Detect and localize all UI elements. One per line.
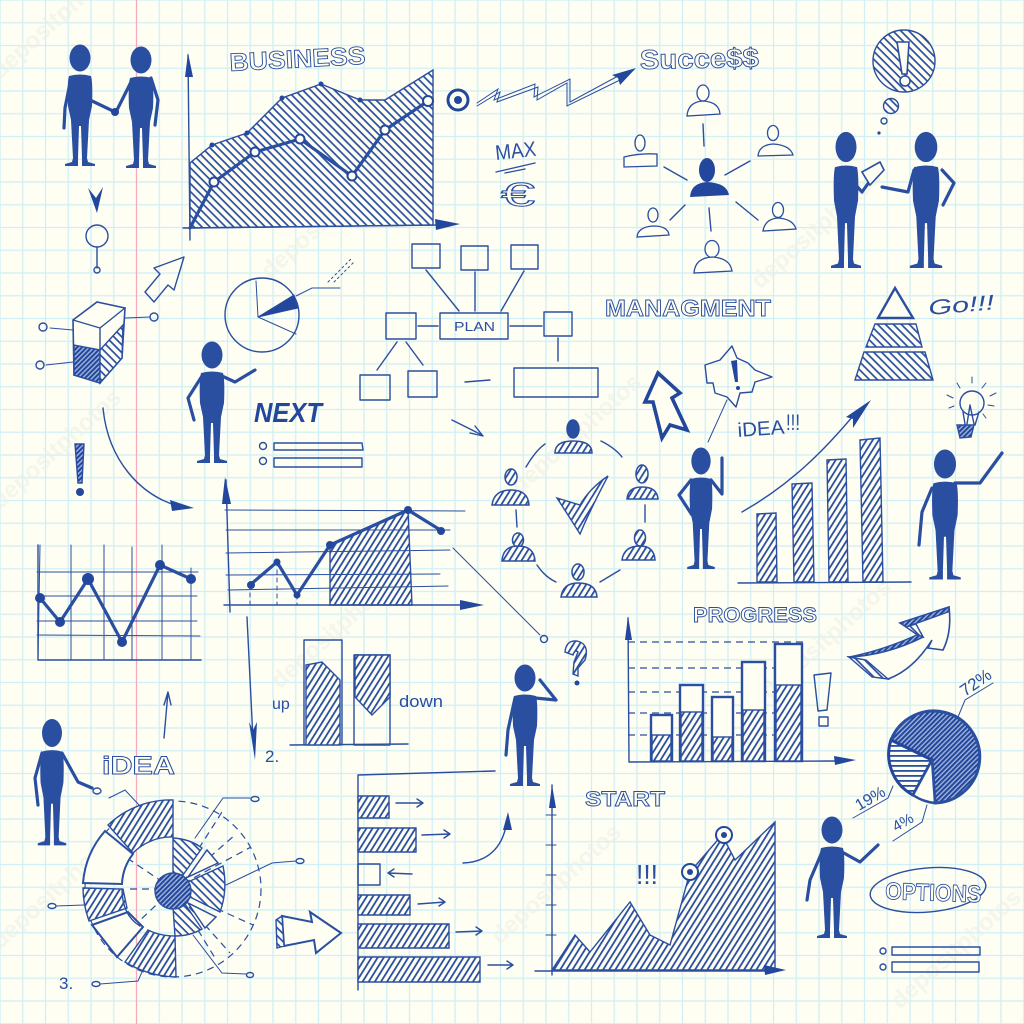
watermarks: depositphotos (486, 819, 627, 949)
watermarks: depositphotos (266, 564, 407, 694)
figure with pointing arm (807, 816, 878, 938)
light bulb (947, 377, 996, 438)
small up arrow (164, 692, 171, 738)
left line chart (35, 545, 201, 660)
up down bar chart: up (272, 696, 290, 713)
rising bar chart with arrow (738, 400, 911, 583)
outline arrow up right (145, 257, 184, 302)
thinking figure (506, 664, 556, 786)
business area chart (183, 53, 460, 240)
figure at idea wheel (35, 719, 92, 845)
figure with open hand (188, 342, 255, 463)
start area chart (535, 785, 786, 975)
down arrow with number 2 (247, 617, 279, 766)
max euro note: MAX (494, 138, 537, 165)
max euro note (494, 138, 537, 213)
heading: managment: MANAGMENT (605, 295, 771, 321)
people network (624, 85, 796, 273)
heading: success: Succe$$ (640, 43, 759, 75)
figure pointing with marker (679, 448, 722, 569)
two figures discussing (831, 132, 954, 268)
bold outline arrow (645, 373, 687, 438)
flow chart plan (360, 244, 598, 400)
horizontal bar chart (358, 771, 513, 990)
pyramid (855, 288, 933, 380)
go note: Go!!! (927, 291, 995, 320)
3d box with leaders (36, 302, 158, 383)
heading: business: BUSINESS (229, 42, 366, 77)
max euro note: € (501, 176, 535, 213)
exclamation with box (814, 673, 831, 726)
progress bar chart (625, 616, 856, 765)
pie chart percentages: 4% (890, 810, 917, 835)
watermarks: depositphotos (756, 574, 897, 704)
up down bar chart: down (399, 692, 443, 711)
exclamation mark left (75, 444, 84, 496)
check and pin (86, 187, 108, 273)
options badge: OPTIONS (885, 878, 982, 908)
segmented wheel diagram (48, 788, 304, 993)
question mark (565, 641, 586, 686)
options badge (868, 863, 988, 917)
figures shaking hands (64, 44, 158, 168)
flow chart plan: PLAN (454, 319, 495, 334)
pie chart percentages (852, 665, 995, 841)
watermarks: depositphotos (506, 369, 647, 499)
watermarks: depositphotos (746, 164, 887, 294)
pie chart with leader (225, 258, 354, 352)
pie chart percentages: 72% (956, 665, 995, 700)
down arrow with number 2: 2. (265, 747, 279, 766)
pie chart percentages: 19% (852, 784, 889, 814)
burst idea callout: !!! (786, 410, 800, 435)
figure with raised pointing arm (919, 450, 1002, 580)
thought bubble with exclamation (873, 30, 935, 135)
zigzag arrow to success (448, 68, 636, 110)
connector with dot (453, 548, 548, 642)
3d outline arrow (276, 912, 341, 953)
curved 3d arrow (849, 607, 950, 679)
center line chart with shaded area (222, 477, 484, 612)
team circle (492, 420, 658, 597)
heading: idea: iDEA (102, 752, 175, 780)
small pointer arrow (452, 420, 483, 436)
burst idea callout (705, 346, 800, 442)
segmented wheel diagram: 3. (59, 974, 73, 993)
heading: next: NEXT (254, 397, 325, 428)
long curved arrow (103, 408, 194, 511)
heading: start: START (585, 788, 665, 811)
watermarks: depositphotos (886, 884, 1024, 1014)
burst idea callout: iDEA (737, 417, 786, 442)
heading: progress: PROGRESS (693, 604, 817, 627)
exclamation marks: !!! (636, 859, 658, 890)
watermarks: depositphotos (256, 154, 397, 284)
options list bars (880, 947, 980, 972)
up down bar chart (272, 640, 443, 745)
next list bars (260, 442, 363, 467)
